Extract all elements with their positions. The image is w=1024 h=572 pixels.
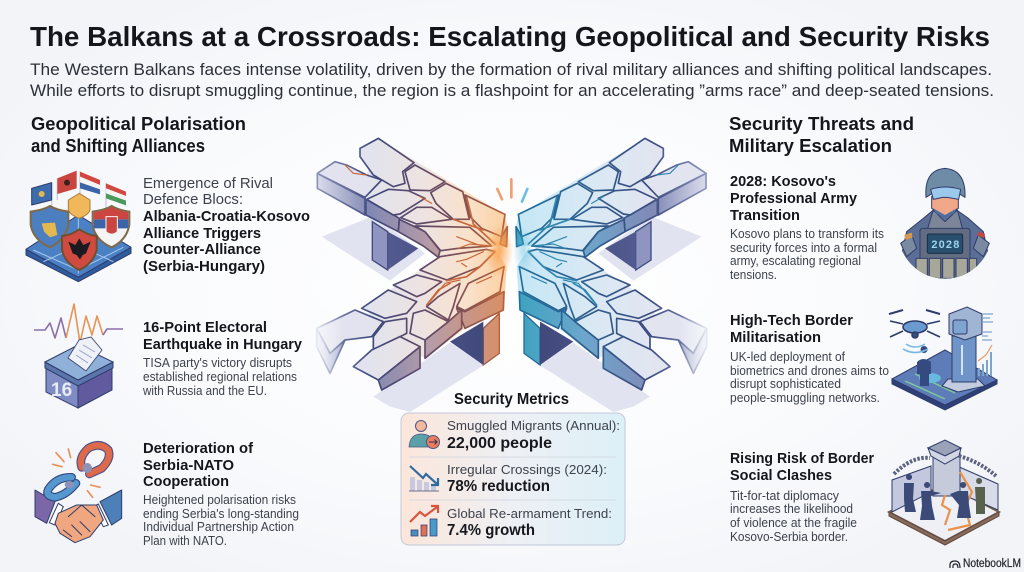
right heading: Military Escalation bbox=[729, 135, 892, 156]
block: border militarisation: people-smuggling networks. bbox=[730, 391, 880, 405]
block: electoral earthquake: TISA party's victory disrupts bbox=[143, 356, 292, 370]
metric: irregular crossings: Irregular Crossings (2024): bbox=[447, 462, 607, 477]
metric: smuggled migrants: Smuggled Migrants (Annual): bbox=[447, 418, 620, 433]
block: electoral earthquake: 16-Point Electoral bbox=[143, 319, 267, 336]
block: kosovo army: tensions. bbox=[730, 268, 777, 282]
drone bbox=[889, 310, 940, 352]
block: rival defence blocs: Emergence of Rival bbox=[143, 175, 273, 192]
block: electoral earthquake: Earthquake in Hungary bbox=[143, 336, 303, 353]
block: rival defence blocs: Albania-Croatia-Kosovo bbox=[143, 208, 310, 225]
blue glow bbox=[513, 227, 534, 274]
block: serbia-nato cooperation bbox=[143, 440, 299, 548]
icon: ballot box with seismic wave: 16 bbox=[51, 380, 72, 401]
block: border clashes: Social Clashes bbox=[730, 467, 832, 484]
block: border clashes: increases the likelihood bbox=[730, 502, 853, 516]
intro text bbox=[30, 61, 994, 100]
block: electoral earthquake: established regional relations bbox=[143, 370, 297, 384]
right heading: Security Threats and bbox=[729, 113, 914, 134]
right half: blue fractured slabs bbox=[516, 138, 713, 412]
icon: border wall with watchtower and clash bbox=[889, 440, 999, 545]
block: border militarisation: UK-led deployment of bbox=[730, 350, 845, 364]
intro text: The Western Balkans faces intense volatility, driven by the formation of rival military alliances and shifting political landscapes. bbox=[30, 61, 992, 79]
orange chain link bbox=[81, 445, 109, 474]
block: rival defence blocs: Alliance Triggers bbox=[143, 225, 261, 242]
block: border militarisation: High-Tech Border bbox=[730, 312, 853, 329]
block: serbia-nato cooperation: Individual Partnership Action bbox=[143, 520, 294, 534]
left heading: Geopolitical Polarisation bbox=[31, 113, 246, 134]
block: border militarisation: disrupt sophisticated bbox=[730, 377, 841, 391]
block: kosovo army: security forces into a formal bbox=[730, 241, 877, 255]
block: border clashes: Rising Risk of Border bbox=[730, 450, 874, 467]
title: The Balkans at a Crossroads: Escalating Geopolitical and Security Risks bbox=[30, 21, 990, 52]
block: electoral earthquake: with Russia and the EU. bbox=[142, 384, 267, 398]
metric: global re-armament: Global Re-armament Trend: bbox=[447, 506, 612, 521]
icon: soldier with 2028 badge: 2028 bbox=[931, 239, 959, 251]
block: kosovo army: Transition bbox=[730, 207, 800, 224]
block: rival defence blocs: Counter-Alliance bbox=[143, 241, 261, 258]
icon: ballot box with seismic wave bbox=[34, 304, 123, 408]
block: border clashes: of violence at the fragile bbox=[730, 516, 857, 530]
block: rival defence blocs: (Serbia-Hungary) bbox=[143, 258, 265, 275]
block: kosovo army: 2028: Kosovo's bbox=[730, 173, 836, 190]
block: border clashes bbox=[730, 450, 874, 544]
metrics heading: Security Metrics bbox=[454, 391, 569, 408]
metric: global re-armament bbox=[410, 506, 612, 539]
block: serbia-nato cooperation: Cooperation bbox=[143, 473, 229, 490]
block: border militarisation bbox=[730, 312, 889, 405]
block: kosovo army: army, escalating regional bbox=[730, 254, 861, 268]
panel: security metrics bbox=[401, 391, 625, 545]
metric: irregular crossings: 78% reduction bbox=[447, 478, 550, 495]
block: rival defence blocs: Defence Blocs: bbox=[143, 191, 243, 208]
block: rival defence blocs bbox=[143, 175, 310, 275]
block: border clashes: Kosovo-Serbia border. bbox=[730, 530, 848, 544]
block: serbia-nato cooperation: Plan with NATO. bbox=[143, 534, 227, 548]
intro text: While efforts to disrupt smuggling continue, the region is a flashpoint for an accelerating ”arms race” and deep-seated tensions. bbox=[30, 82, 994, 100]
icon: alliance shields and flags bbox=[26, 171, 131, 282]
left column: geopolitical polarisation bbox=[26, 113, 310, 548]
left half: orange fractured slabs bbox=[310, 138, 507, 412]
icon: broken chain over handshake bbox=[35, 445, 122, 543]
left heading: and Shifting Alliances bbox=[31, 135, 205, 156]
block: border militarisation: biometrics and drones aims to bbox=[730, 364, 889, 378]
block: kosovo army: Kosovo plans to transform its bbox=[730, 227, 884, 241]
block: kosovo army bbox=[730, 173, 884, 282]
block: border militarisation: Militarisation bbox=[730, 329, 821, 346]
left heading bbox=[31, 113, 246, 156]
block: kosovo army: Professional Army bbox=[730, 190, 858, 207]
tower bbox=[942, 307, 985, 392]
icon: soldier with 2028 badge bbox=[898, 168, 992, 280]
icon: drone and biometric tower bbox=[889, 307, 997, 410]
block: serbia-nato cooperation: Serbia-NATO bbox=[143, 457, 234, 474]
data charts bbox=[978, 314, 993, 376]
central illustration: fractured bridge cross bbox=[310, 138, 713, 412]
block: electoral earthquake bbox=[142, 319, 303, 398]
block: serbia-nato cooperation: ending Serbia's long-standing bbox=[143, 507, 299, 521]
person bbox=[917, 346, 931, 386]
block: border clashes: Tit-for-tat diplomacy bbox=[730, 489, 840, 503]
right column: security threats bbox=[729, 113, 999, 545]
metric: smuggled migrants: 22,000 people bbox=[447, 435, 552, 452]
block: serbia-nato cooperation: Heightened polarisation risks bbox=[143, 493, 296, 507]
metric: irregular crossings bbox=[409, 462, 607, 495]
block: serbia-nato cooperation: Deterioration of bbox=[143, 440, 254, 457]
blue chain link bbox=[47, 445, 109, 497]
metric: global re-armament: 7.4% growth bbox=[447, 522, 535, 539]
orange glow bbox=[485, 224, 513, 277]
sparks bbox=[497, 179, 527, 202]
right heading bbox=[729, 113, 914, 156]
seismic line bbox=[34, 304, 123, 343]
metric: smuggled migrants bbox=[409, 418, 620, 452]
